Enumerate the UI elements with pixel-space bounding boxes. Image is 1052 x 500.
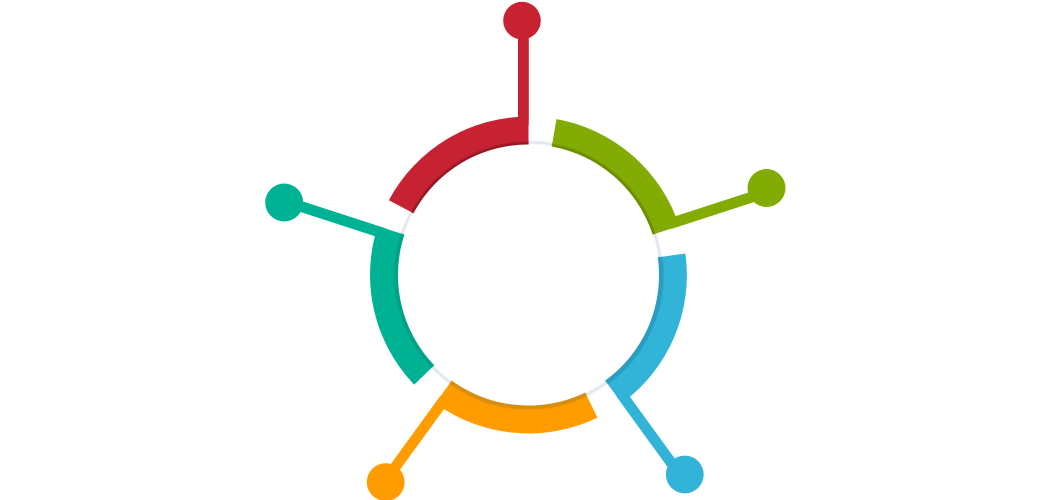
segment 2: green bbox=[552, 119, 766, 235]
segment 3: blue bbox=[605, 253, 687, 477]
pale inner ring bbox=[396, 142, 661, 408]
pin: orange bbox=[367, 463, 405, 500]
segment 1: red bbox=[389, 25, 529, 213]
center circle bbox=[398, 144, 659, 406]
pin: teal bbox=[265, 184, 303, 222]
pin: red bbox=[503, 2, 541, 39]
pin: green bbox=[748, 169, 786, 207]
pin: blue bbox=[666, 456, 704, 493]
segment 4: orange bbox=[381, 381, 597, 483]
segment 5: teal bbox=[287, 197, 434, 385]
